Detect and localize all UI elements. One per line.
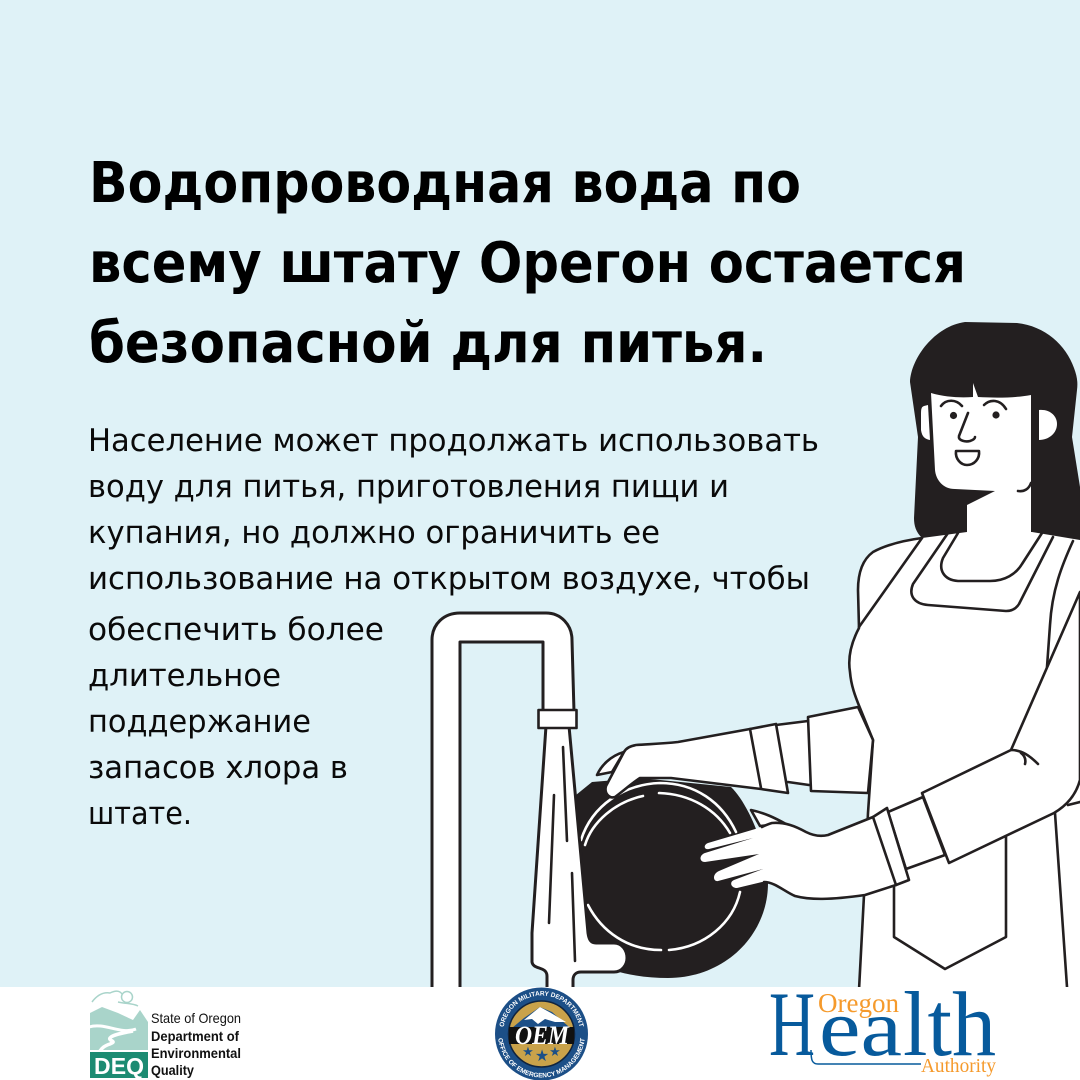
hair xyxy=(910,322,1080,540)
body text: длительное xyxy=(88,658,281,694)
agency name: State of Oregon xyxy=(151,1010,241,1026)
seal ring text: OFFICE OF EMERGENCY MANAGEMENT xyxy=(498,1038,585,1078)
body text: купания, но должно ограничить ее xyxy=(88,515,660,551)
right ear xyxy=(1039,410,1057,440)
faucet pipe xyxy=(432,613,574,990)
stars: ★ xyxy=(535,1046,549,1065)
Health wordmark: ea xyxy=(819,982,902,1073)
logo: Office of Emergency Management seal xyxy=(495,988,588,1080)
body text: использование на открытом воздухе, чтобы xyxy=(88,561,810,597)
left ear xyxy=(921,405,930,440)
body text: штате. xyxy=(88,796,192,832)
Health wordmark: H xyxy=(769,973,815,1075)
facial features xyxy=(941,401,1031,491)
stars xyxy=(522,1045,561,1065)
torso and apron xyxy=(849,530,1080,990)
bracket line xyxy=(811,1050,921,1064)
title xyxy=(89,151,966,376)
footer band xyxy=(0,987,1080,1080)
body text: воду для питья, приготовления пищи и xyxy=(88,469,729,505)
illustration: woman washing a pan xyxy=(432,322,1080,990)
body text: Население может продолжать использовать xyxy=(88,423,819,459)
body text: обеспечить более xyxy=(88,612,384,648)
DEQ letters: DEQ xyxy=(94,1053,144,1079)
mountain xyxy=(512,1007,571,1028)
body text xyxy=(88,423,819,832)
title: безопасной для питья. xyxy=(89,311,767,376)
body text: запасов хлора в xyxy=(88,750,348,786)
agency name: Environmental xyxy=(151,1045,241,1061)
seal ring text xyxy=(498,991,585,1078)
stars: ★ xyxy=(549,1045,561,1060)
frying pan xyxy=(570,752,786,978)
Health wordmark: lth xyxy=(903,973,996,1075)
OEM letters: OEM xyxy=(515,1021,570,1050)
body text: поддержание xyxy=(88,704,311,740)
seal ring text: OREGON MILITARY DEPARTMENT xyxy=(500,991,584,1026)
logo: Oregon Health Authority xyxy=(769,973,996,1077)
left arm and hand xyxy=(606,707,873,797)
OEM band xyxy=(509,1027,574,1044)
agency name: Department of xyxy=(151,1028,239,1044)
faucet collar xyxy=(538,710,576,728)
Oregon wordmark: Oregon xyxy=(818,988,899,1018)
DEQ badge xyxy=(90,1052,148,1078)
title: Водопроводная вода по xyxy=(89,151,801,216)
right arm and hand xyxy=(700,592,1080,899)
logo: Oregon DEQ xyxy=(89,991,241,1079)
water stream xyxy=(532,726,627,990)
title: всему штату Орегон остается xyxy=(89,231,966,296)
face and neck xyxy=(931,383,1031,532)
landscape mark xyxy=(89,991,148,1051)
Health wordmark xyxy=(769,973,996,1075)
stars: ★ xyxy=(522,1045,534,1060)
agency name xyxy=(151,1010,241,1078)
agency name: Quality xyxy=(151,1062,194,1078)
Authority wordmark: Authority xyxy=(921,1055,996,1077)
